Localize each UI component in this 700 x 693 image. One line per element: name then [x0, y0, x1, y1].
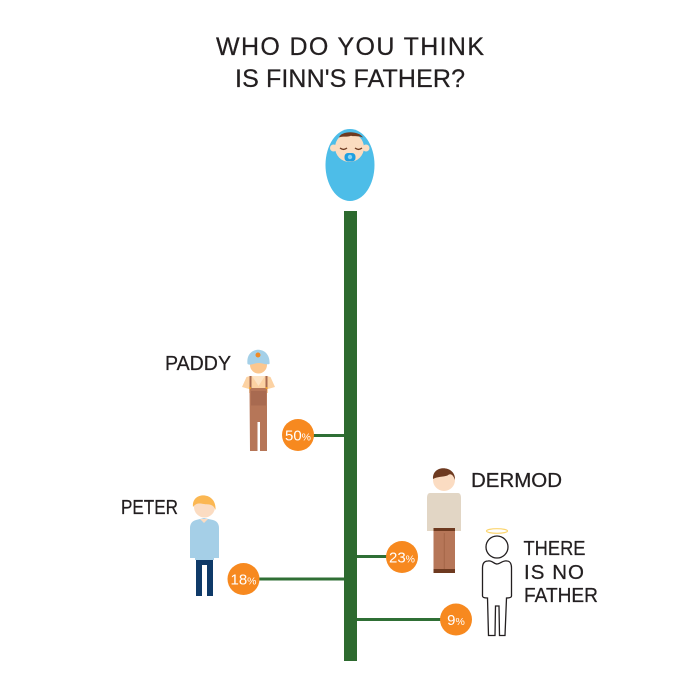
title: IS FINN'S FATHER? — [235, 65, 465, 93]
label: Paddy: PADDY — [165, 353, 231, 375]
label: Peter: PETER — [121, 497, 178, 519]
badge: 23%: 23% — [389, 550, 415, 566]
title: WHO DO YOU THINK — [216, 33, 484, 61]
badge: 50% — [282, 419, 314, 451]
badge: 50%: 50% — [285, 428, 311, 444]
label: There is no father: FATHER — [524, 584, 598, 607]
figure: Peter — [190, 495, 219, 596]
figure: Dermod — [427, 468, 461, 573]
figure: no father outline with halo — [482, 529, 512, 636]
label: There is no father — [524, 537, 598, 607]
title — [216, 33, 484, 93]
label: There is no father: IS NO — [524, 561, 584, 584]
badge: 23% — [386, 541, 418, 573]
timeline trunk — [344, 211, 357, 661]
badge: 9% — [440, 604, 472, 636]
branch: 18% — [257, 578, 344, 580]
badge: 18%: 18% — [230, 572, 257, 588]
label: Dermod: DERMOD — [471, 470, 562, 492]
branch: 50% — [312, 434, 344, 437]
badge: 9%: 9% — [447, 612, 465, 629]
badge: 18% — [228, 563, 260, 595]
branch: 9% — [357, 618, 442, 621]
branch: 23% — [357, 555, 388, 558]
label: There is no father: THERE — [524, 537, 586, 560]
figure: Paddy — [242, 350, 275, 451]
icon: swaddled baby — [326, 129, 374, 201]
